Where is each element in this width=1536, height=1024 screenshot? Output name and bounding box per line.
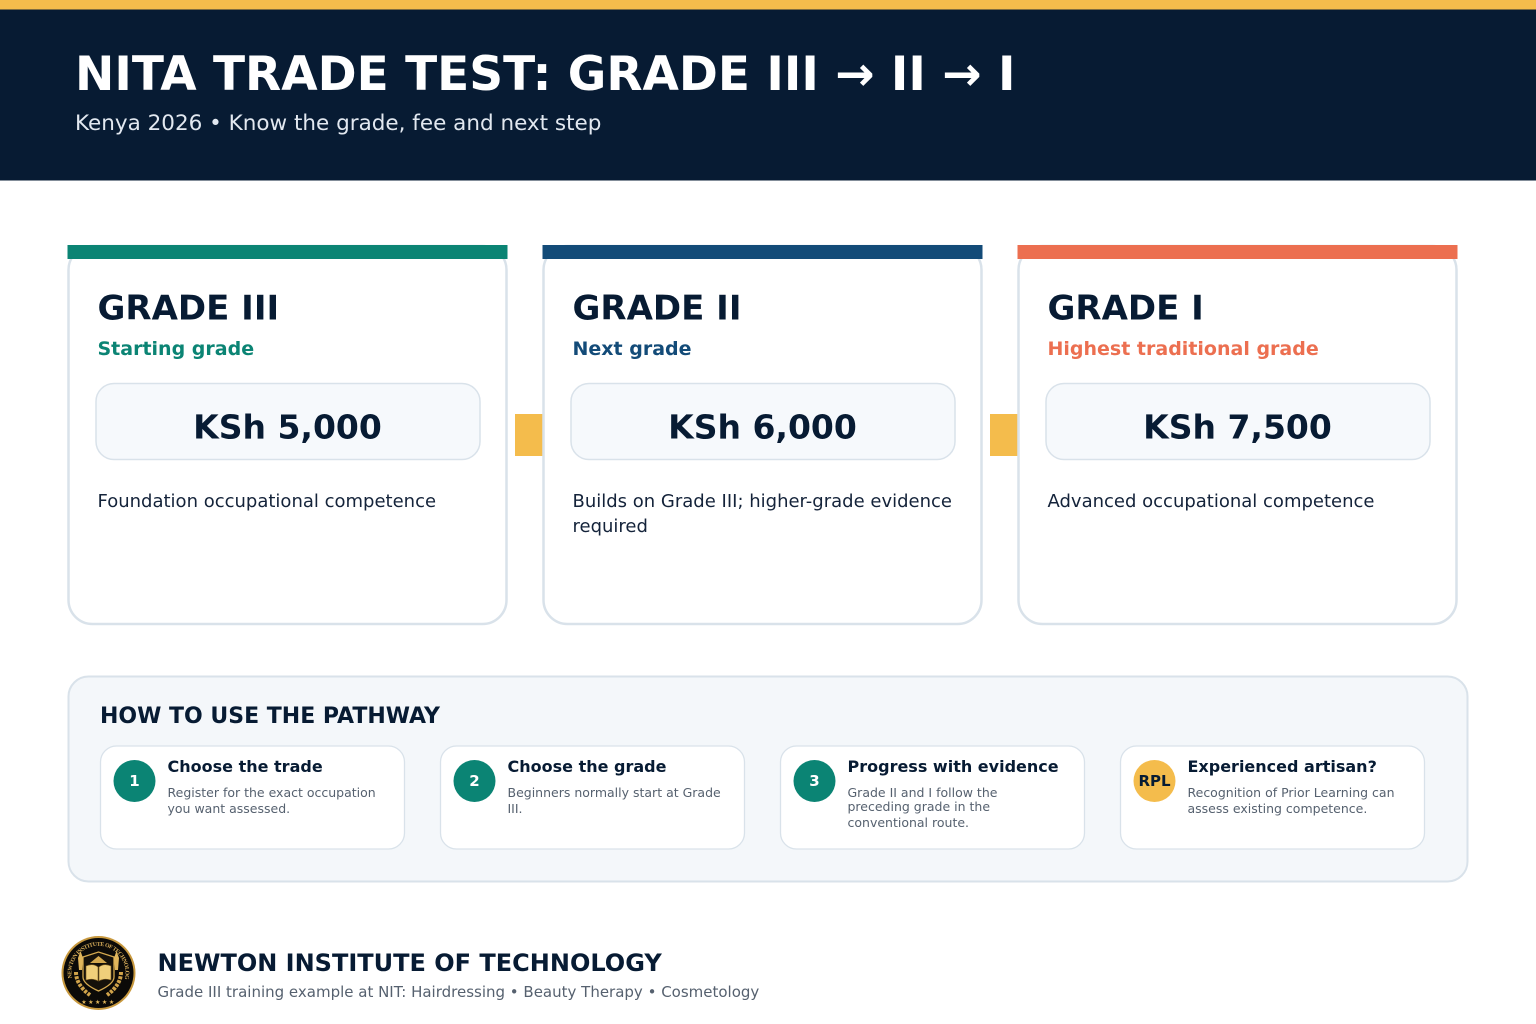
step 3: 3: [809, 772, 820, 790]
heading: Grade II: GRADE II: [572, 288, 742, 328]
heading: Grade I: GRADE I: [1048, 288, 1204, 328]
step 3: Progress with evidence: [848, 757, 1059, 776]
footer: institute name: NEWTON INSTITUTE OF TECHNOLOGY: [158, 949, 662, 977]
heading: Grade III: GRADE III: [98, 288, 279, 328]
footer: training example: Grade III training example at NIT: Hairdressing • Beauty Therapy • Cosmetology: [158, 983, 759, 1001]
icon: Newton Institute seal: NEWTON INSTITUTE OF TECHNOLOGY: [68, 942, 130, 980]
panel: Grade I: [1018, 245, 1458, 624]
fee box: KSh 6,000: [571, 384, 955, 460]
step 2: [440, 746, 744, 849]
heading: how to use the pathway: HOW TO USE THE PATHWAY: [100, 704, 441, 729]
description: Grade II: Builds on Grade III; higher-grade evidence: [572, 491, 952, 512]
step 2: III.: [508, 801, 523, 816]
title: NITA TRADE TEST: GRADE III → II → I: [75, 47, 1016, 102]
subheading: Next grade: Next grade: [572, 338, 692, 360]
fee box: KSh 7,500: [1046, 384, 1430, 460]
fee box: KSh 5,000: KSh 5,000: [193, 408, 382, 446]
step 2: 2: [469, 772, 480, 790]
description: Grade II: required: [572, 516, 648, 537]
step 4: RPL: [1120, 746, 1424, 849]
step 4: RPL: assess existing competence.: [1188, 801, 1367, 816]
step 4: RPL: Experienced artisan?: [1188, 757, 1377, 776]
connector: Grade II to Grade I: [990, 414, 1018, 456]
connector: Grade III to Grade II: [515, 414, 543, 456]
fee box: KSh 7,500: KSh 7,500: [1143, 408, 1332, 446]
subheading: Highest traditional grade: Highest traditional grade: [1048, 338, 1319, 360]
step 3: conventional route.: [848, 815, 969, 830]
step 4: RPL: RPL: [1138, 772, 1171, 790]
fee box: KSh 6,000: KSh 6,000: [668, 408, 857, 446]
panel: Grade II: [542, 245, 982, 624]
description: Grade III: Foundation occupational competence: [98, 491, 436, 512]
step 1: you want assessed.: [168, 801, 290, 816]
panel: Grade III: [68, 245, 508, 624]
step 1: Choose the trade: [168, 757, 323, 776]
panel: how to use the pathway: [68, 676, 1468, 882]
description: Grade I: Advanced occupational competence: [1048, 491, 1374, 512]
icon: Newton Institute seal: [62, 936, 136, 1010]
step 4: RPL: Recognition of Prior Learning can: [1188, 785, 1394, 800]
step 1: [100, 746, 404, 849]
step 2: Choose the grade: [508, 757, 667, 776]
step 3: [780, 746, 1084, 849]
step 3: Grade II and I follow the: [848, 785, 998, 800]
step 1: 1: [129, 772, 140, 790]
subtitle: Kenya 2026 • Know the grade, fee and next step: [75, 111, 601, 136]
step 3: preceding grade in the: [848, 799, 990, 814]
header band: [0, 0, 1536, 180]
step 2: Beginners normally start at Grade: [508, 785, 721, 800]
fee box: KSh 5,000: [96, 384, 480, 460]
step 1: Register for the exact occupation: [168, 785, 376, 800]
icon: Newton Institute seal: ★★★★★: [81, 999, 116, 1006]
subheading: Starting grade: Starting grade: [98, 338, 254, 360]
